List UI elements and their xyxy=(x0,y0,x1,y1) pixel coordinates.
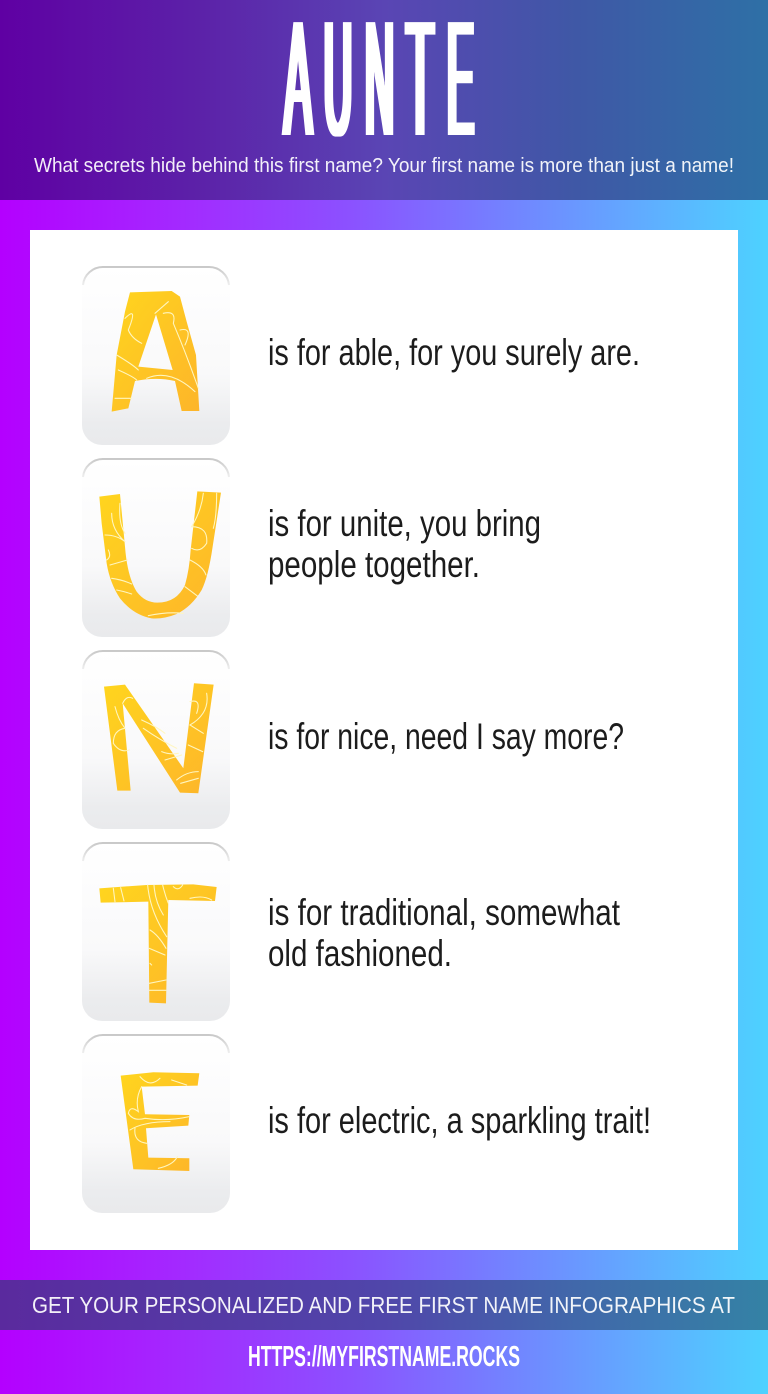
tile: letter N xyxy=(82,651,230,829)
footer band xyxy=(0,1280,768,1330)
text: T: is for traditional, somewhat xyxy=(268,892,621,933)
tile: letter E xyxy=(82,1035,230,1213)
title xyxy=(284,0,474,170)
text: N: is for nice, need I say more? xyxy=(268,716,624,757)
text: T xyxy=(268,892,621,974)
tile: letter U xyxy=(82,459,230,637)
footer url: HTTPS://MYFIRSTNAME.ROCKS xyxy=(248,1341,520,1373)
subtitle: What secrets hide behind this first name? Your first name is more than just a name! xyxy=(34,155,734,177)
icon: letter A xyxy=(112,291,199,412)
white panel xyxy=(30,230,738,1250)
tile: letter T xyxy=(82,843,230,1021)
tile: letter A xyxy=(82,267,230,445)
icon: letter E xyxy=(121,1072,199,1171)
text: U: is for unite, you bring xyxy=(268,503,541,544)
icon: letter U xyxy=(99,491,221,618)
text: U: people together. xyxy=(268,544,480,585)
header band xyxy=(0,0,768,200)
text: T: old fashioned. xyxy=(268,933,452,974)
text: A: is for able, for you surely are. xyxy=(268,332,640,373)
icon: letter T xyxy=(99,884,217,1003)
text: E: is for electric, a sparkling trait! xyxy=(268,1100,651,1141)
icon: letter N xyxy=(104,683,214,793)
text: U xyxy=(268,503,541,585)
